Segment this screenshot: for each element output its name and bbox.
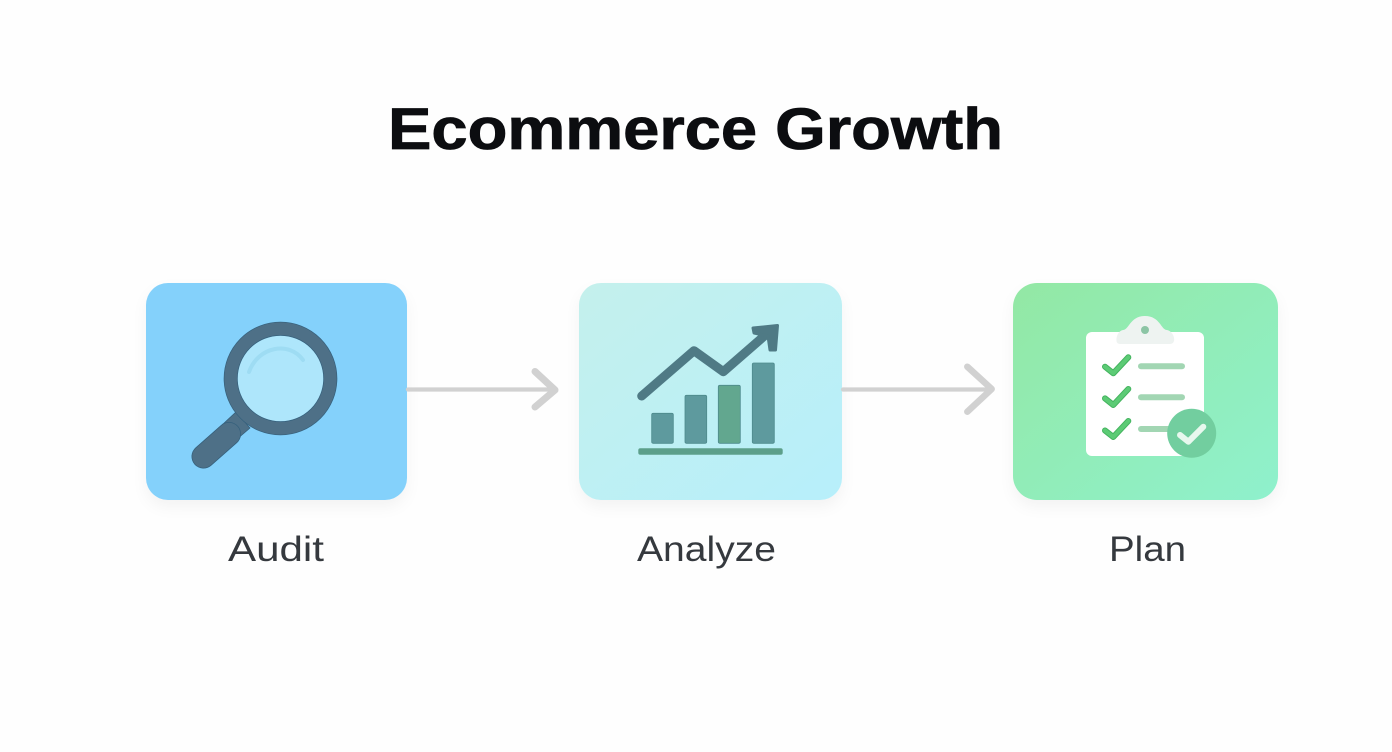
- label: analyze: Analyze: [637, 530, 776, 569]
- label: plan: Plan: [1109, 530, 1186, 569]
- label: audit: Audit: [228, 530, 324, 569]
- panel: plan: [1013, 283, 1278, 569]
- audit card: [146, 283, 407, 500]
- analyze card: [579, 283, 842, 500]
- plan card: [1013, 283, 1278, 500]
- panel: audit: [146, 283, 407, 569]
- panel: analyze: [579, 283, 842, 569]
- icon: magnifying glass: [204, 329, 330, 456]
- icon: growth chart: [638, 326, 783, 455]
- icon: clipboard checklist: [1086, 316, 1216, 458]
- title: Ecommerce Growth: [388, 97, 1003, 162]
- arrow: analyze to plan: [843, 367, 992, 412]
- arrow: audit to analyze: [408, 372, 555, 407]
